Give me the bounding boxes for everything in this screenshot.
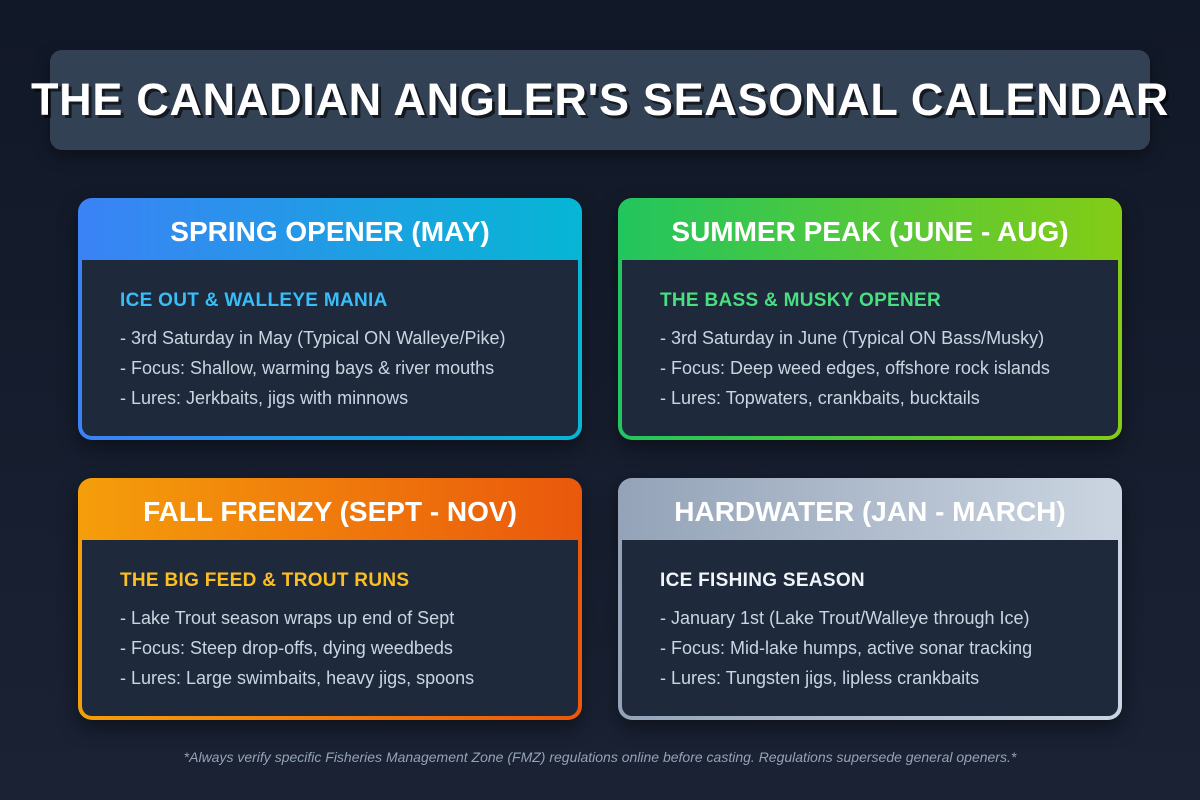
winter body: - January 1st (Lake Trout/Walleye through Ice) — [660, 608, 1030, 628]
fall body: - Focus: Steep drop-offs, dying weedbeds — [120, 638, 453, 658]
winter body — [622, 540, 1118, 716]
panel: fall — [78, 478, 582, 720]
spring body: - 3rd Saturday in May (Typical ON Walleye/Pike) — [120, 328, 505, 348]
panel: winter — [618, 478, 1122, 720]
panel: spring — [78, 198, 582, 440]
winter body: - Lures: Tungsten jigs, lipless crankbaits — [660, 668, 979, 688]
spring body: ICE OUT & WALLEYE MANIA — [120, 290, 388, 311]
title — [50, 50, 1150, 150]
footer note: *Always verify specific Fisheries Management Zone (FMZ) regulations online before casting. Regulations supersede general openers.* — [184, 749, 1016, 765]
title: THE CANADIAN ANGLER'S SEASONAL CALENDAR — [31, 74, 1169, 125]
summer body: - Lures: Topwaters, crankbaits, bucktails — [660, 388, 980, 408]
fall header: FALL FRENZY (SEPT - NOV) — [143, 496, 517, 527]
winter body: ICE FISHING SEASON — [660, 570, 865, 591]
spring body: - Focus: Shallow, warming bays & river mouths — [120, 358, 494, 378]
spring body: - Lures: Jerkbaits, jigs with minnows — [120, 388, 408, 408]
summer body: THE BASS & MUSKY OPENER — [660, 290, 941, 311]
fall body — [82, 540, 578, 716]
winter body: - Focus: Mid-lake humps, active sonar tracking — [660, 638, 1032, 658]
summer header: SUMMER PEAK (JUNE - AUG) — [671, 216, 1069, 247]
spring body — [82, 260, 578, 436]
summer body: - 3rd Saturday in June (Typical ON Bass/Musky) — [660, 328, 1044, 348]
fall body: - Lake Trout season wraps up end of Sept — [120, 608, 454, 628]
panel: summer — [618, 198, 1122, 440]
summer body — [622, 260, 1118, 436]
spring header: SPRING OPENER (MAY) — [170, 216, 490, 247]
summer body: - Focus: Deep weed edges, offshore rock islands — [660, 358, 1050, 378]
fall body: - Lures: Large swimbaits, heavy jigs, spoons — [120, 668, 474, 688]
fall body: THE BIG FEED & TROUT RUNS — [120, 570, 409, 591]
winter header: HARDWATER (JAN - MARCH) — [674, 496, 1066, 527]
